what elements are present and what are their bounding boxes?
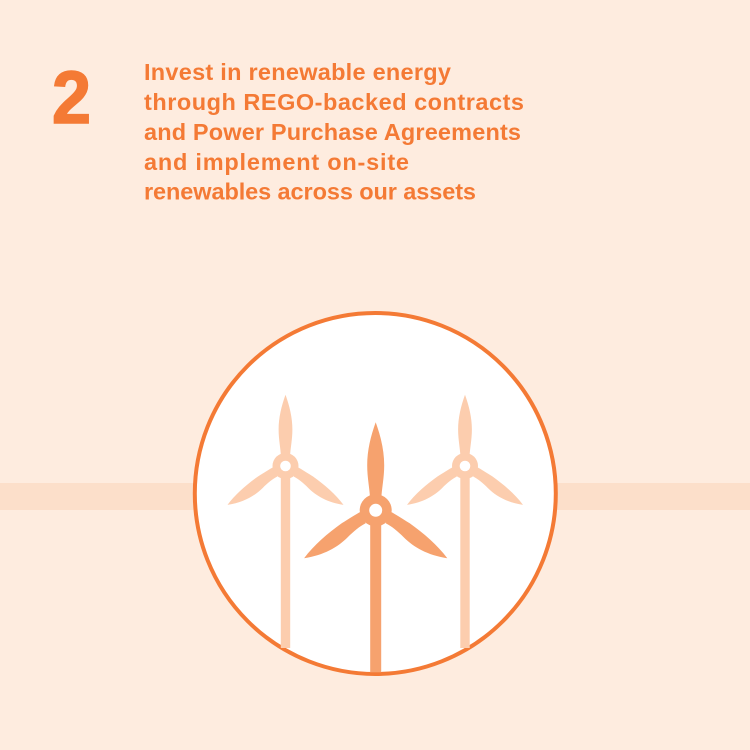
icon: left wind turbine [228, 395, 343, 648]
icon: right wind turbine [407, 395, 523, 648]
horizontal band [0, 483, 750, 510]
step number: 2 [52, 56, 91, 139]
heading text: Invest in renewable energy [144, 59, 451, 85]
heading text [144, 59, 524, 204]
heading text: and Power Purchase Agreements [144, 119, 521, 145]
circle badge [195, 313, 556, 674]
heading text: and implement on-site [144, 149, 409, 175]
heading text: through REGO-backed contracts [144, 89, 524, 115]
heading text: renewables across our assets [144, 178, 476, 204]
icon: centre wind turbine [304, 422, 447, 672]
